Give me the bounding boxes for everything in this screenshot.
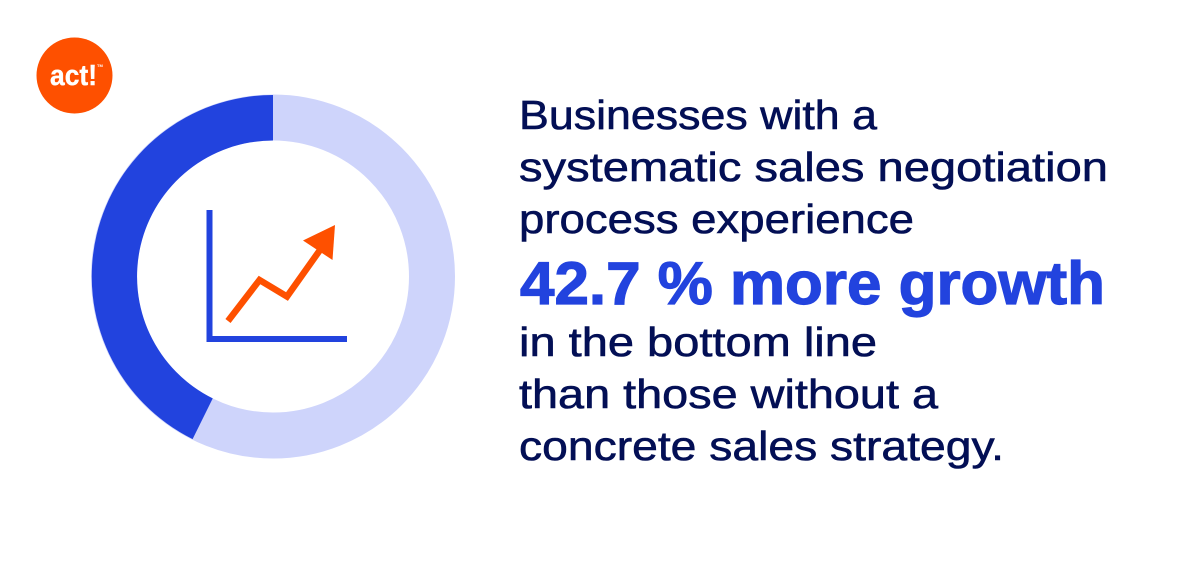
text block: statistic statement: than those without a — [519, 371, 938, 417]
text block: statistic statement: in the bottom line — [519, 319, 877, 365]
text block: statistic statement: process experience — [519, 196, 914, 242]
donut chart: 42.7 percent — [92, 95, 432, 439]
text block: statistic statement: concrete sales strategy. — [519, 423, 1004, 469]
text block: statistic statement — [519, 92, 1108, 469]
logo: act! badge: TM — [97, 63, 103, 68]
icon: growth line chart — [210, 210, 347, 339]
highlighted statistic: 42.7 % more growth — [520, 250, 1105, 317]
text block: statistic statement: Businesses with a — [519, 92, 877, 138]
logo: act! badge — [36, 38, 112, 114]
logo: act! badge: act! — [50, 60, 97, 92]
text block: statistic statement: systematic sales negotiation — [519, 144, 1108, 190]
